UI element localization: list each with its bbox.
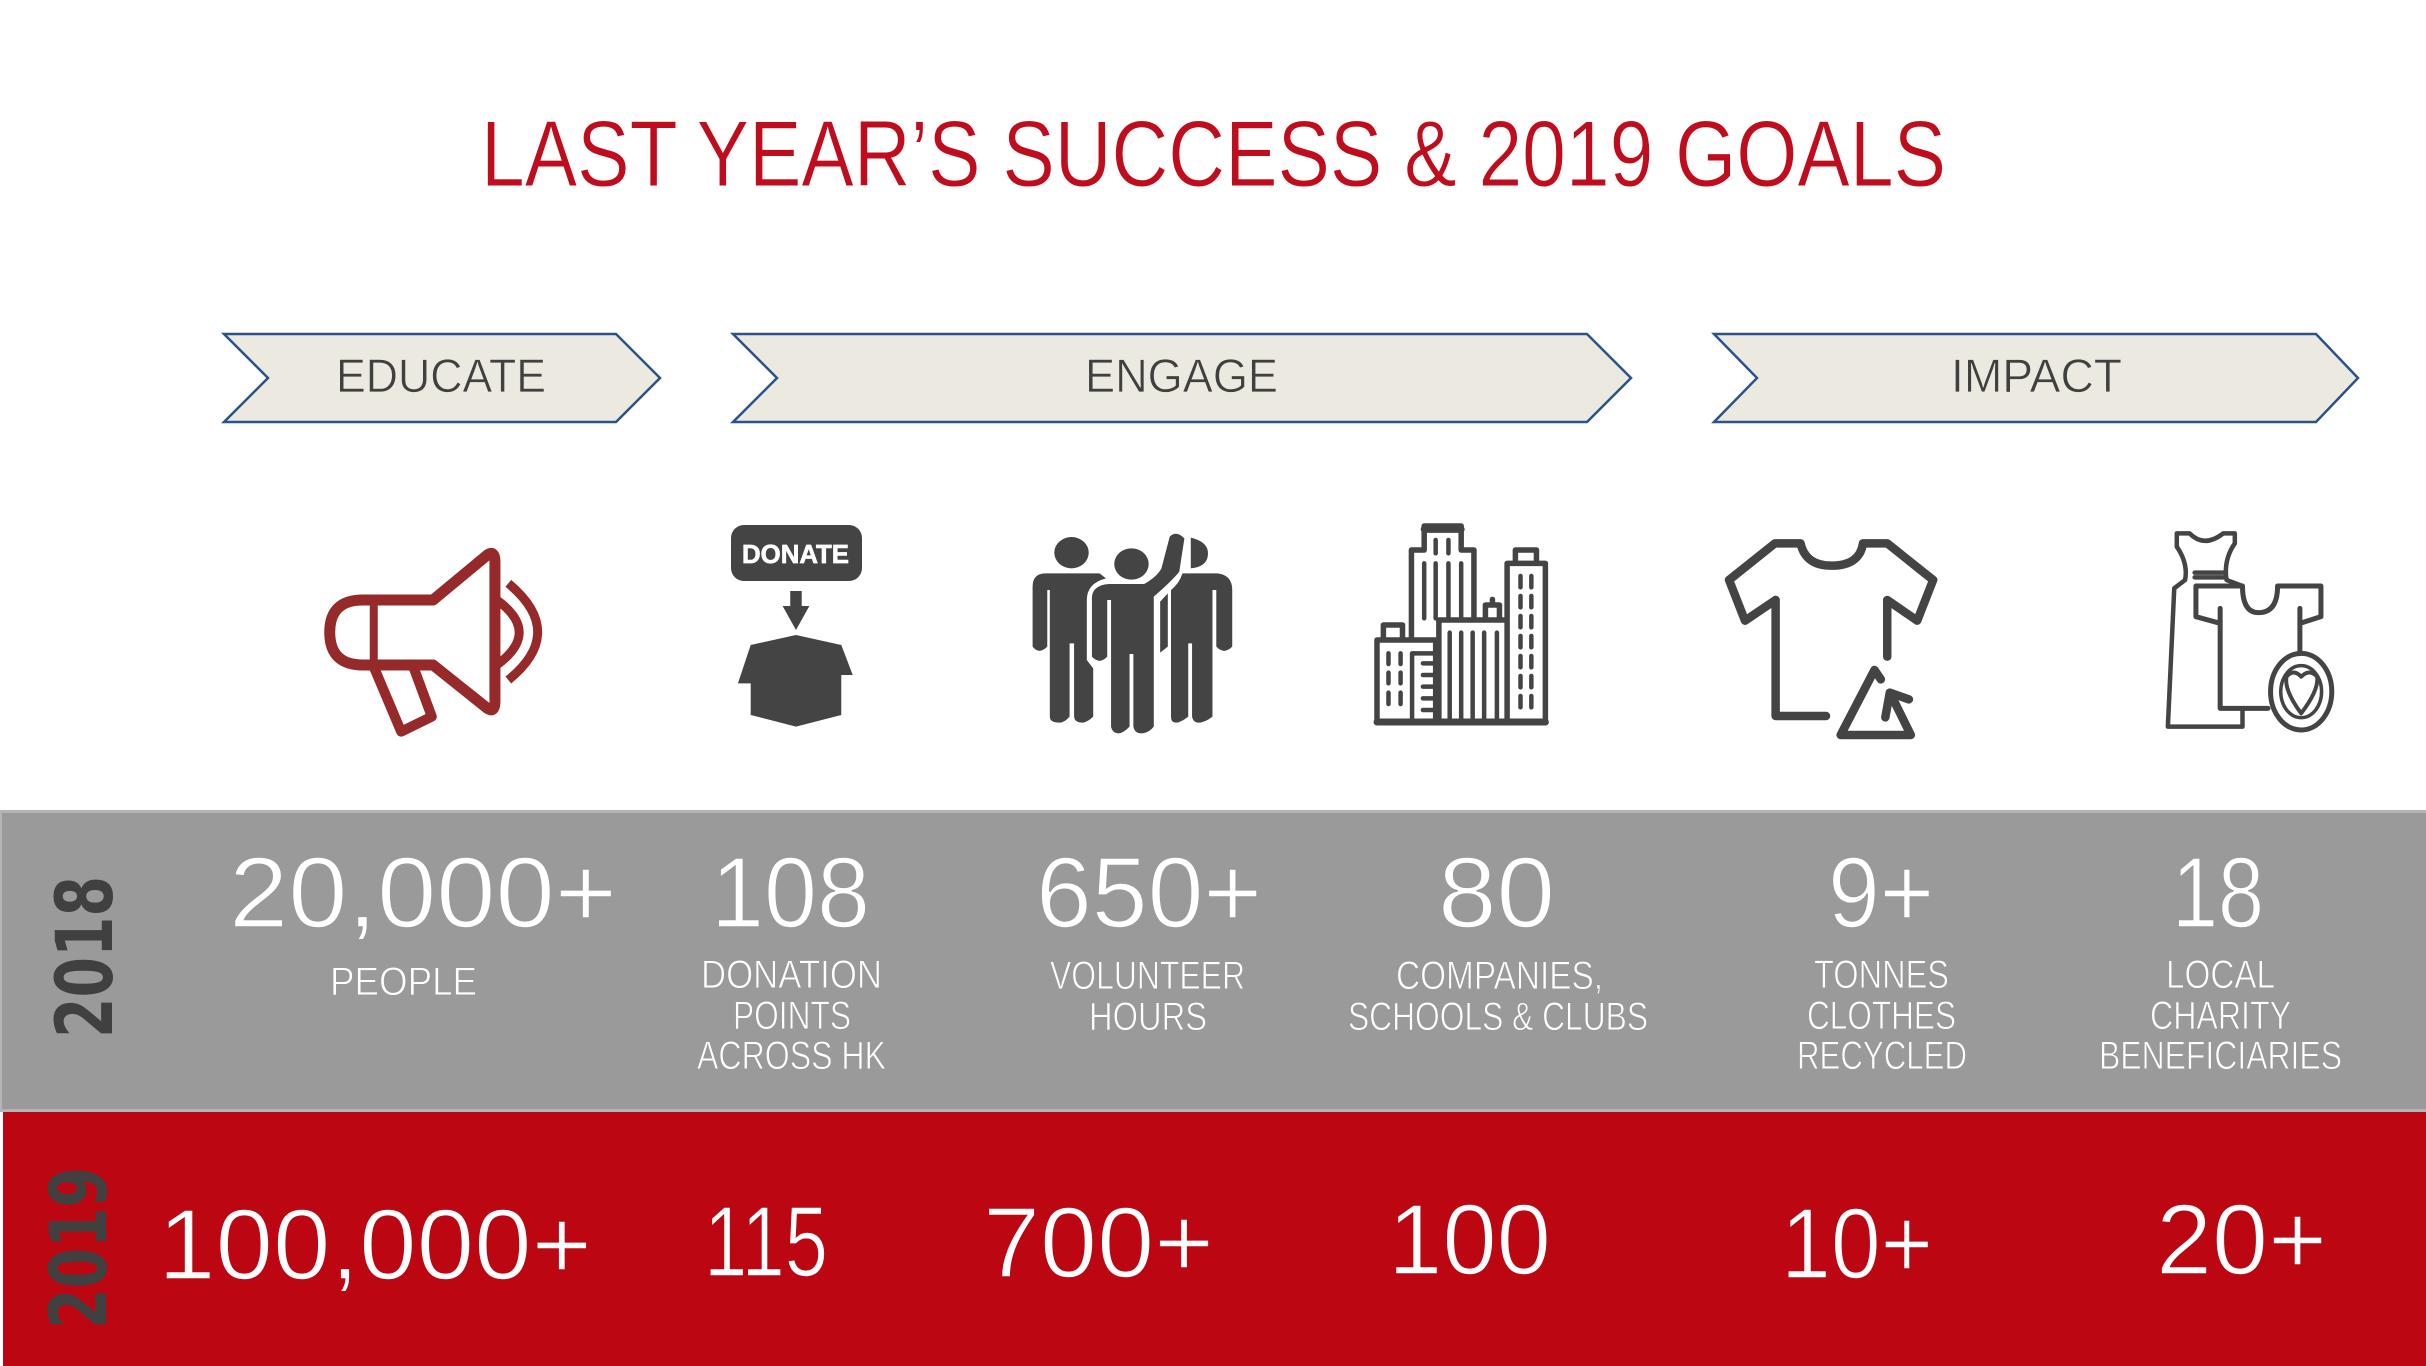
goal: 20+: 20+: [2156, 1184, 2327, 1296]
year label 2018: 2018: [41, 876, 131, 1038]
chevron: educate: EDUCATE: [336, 349, 546, 402]
goal: 100,000+: 100,000+: [158, 1189, 592, 1301]
chevron: engage: ENGAGE: [1085, 349, 1278, 402]
stat: 9+ tonnes clothes recycled: [1797, 837, 1967, 1078]
stat: 80 companies, schools and clubs: 80: [1438, 837, 1555, 949]
icon: t-shirt recycling: [1729, 543, 1933, 735]
stat: 20,000+ people: 20,000+: [229, 837, 617, 949]
stat: 18 local charity beneficiaries: LOCAL: [2166, 953, 2275, 997]
goal: 100: 100: [1388, 1184, 1551, 1296]
stat: 80 companies, schools and clubs: [1348, 837, 1648, 1039]
stat: 108 donation points: POINTS: [733, 994, 851, 1038]
stat: 9+ tonnes clothes recycled: RECYCLED: [1797, 1034, 1967, 1078]
goal: 700+: 700+: [983, 1187, 1214, 1299]
stat: 650+ volunteer hours: VOLUNTEER: [1050, 954, 1245, 998]
stat: 18 local charity beneficiaries: CHARITY: [2150, 994, 2291, 1038]
stat: 9+ tonnes clothes recycled: 9+: [1828, 837, 1934, 949]
stat: 20,000+ people: [229, 837, 617, 1004]
icon: donate box: [731, 525, 862, 727]
panel: 2018 results: [0, 810, 2426, 1112]
stat: 80 companies, schools and clubs: COMPANIES,: [1396, 954, 1603, 998]
panel: 2019 goals: [3, 1112, 2426, 1366]
stat: 108 donation points: ACROSS HK: [697, 1034, 886, 1078]
chevron: educate: [224, 334, 660, 422]
title: LAST YEAR’S SUCCESS & 2019 GOALS: [481, 101, 1946, 206]
stat: 80 companies, schools and clubs: SCHOOLS & CLUBS: [1348, 995, 1648, 1039]
stat: 18 local charity beneficiaries: [2099, 837, 2342, 1078]
stat: 650+ volunteer hours: 650+: [1036, 837, 1262, 949]
stat: 650+ volunteer hours: HOURS: [1089, 995, 1207, 1039]
stat: 108 donation points: DONATION: [701, 953, 882, 997]
icon: donated clothes with heart tag: [2168, 533, 2332, 730]
stat: 108 donation points: [697, 837, 886, 1078]
icon: city buildings: [1377, 526, 1545, 723]
year label 2019: 2019: [35, 1167, 125, 1329]
stat: 9+ tonnes clothes recycled: TONNES: [1814, 953, 1949, 997]
stat: 650+ volunteer hours: [1036, 837, 1262, 1039]
stat: 20,000+ people: PEOPLE: [330, 960, 477, 1004]
icon: volunteers: [1033, 534, 1232, 733]
chevron: impact: IMPACT: [1951, 349, 2122, 402]
goal: 10+: 10+: [1781, 1188, 1933, 1300]
stat: 108 donation points: 108: [711, 837, 870, 949]
icon: donate box: DONATE: [742, 539, 849, 569]
stat: 18 local charity beneficiaries: 18: [2172, 837, 2264, 949]
stat: 18 local charity beneficiaries: BENEFICIARIES: [2099, 1034, 2342, 1078]
goal: 115: 115: [704, 1186, 828, 1298]
icon: megaphone: [330, 553, 538, 732]
stat: 9+ tonnes clothes recycled: CLOTHES: [1807, 994, 1956, 1038]
chevron: impact: [1714, 334, 2358, 422]
chevron: engage: [733, 334, 1631, 422]
